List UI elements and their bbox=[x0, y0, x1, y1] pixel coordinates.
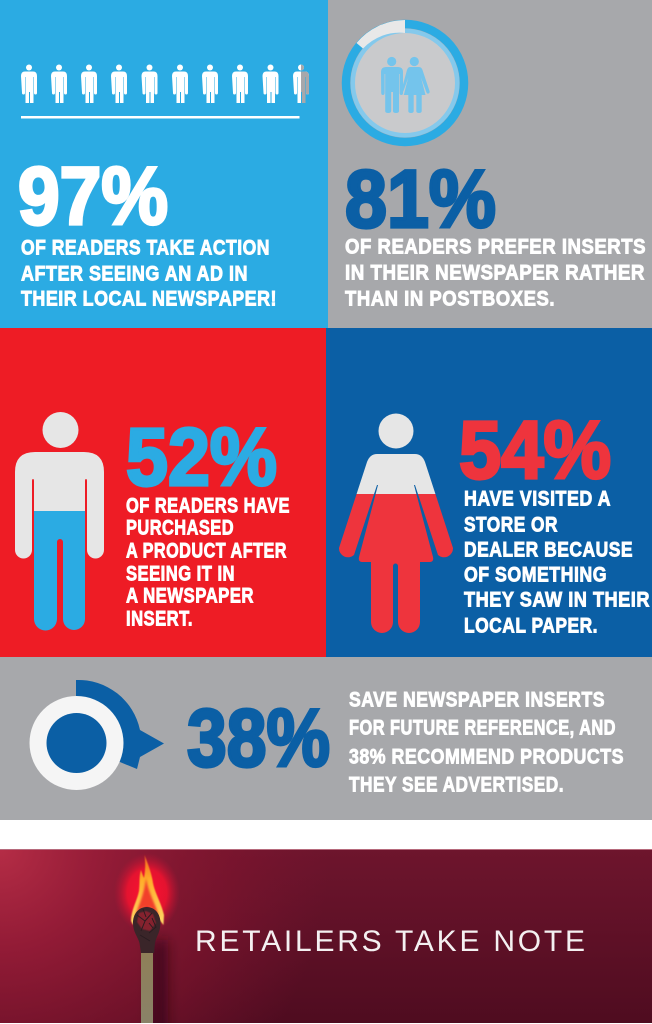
icon: couple in progress ring bbox=[346, 20, 464, 142]
text: purchased: OF READERS HAVE bbox=[126, 493, 290, 517]
icon: man two-tone figure bbox=[15, 412, 104, 630]
text: visited a store: OF SOMETHING bbox=[464, 562, 607, 586]
stat: 81%: 81% bbox=[345, 154, 496, 245]
banner: retailers take note bbox=[0, 849, 652, 1024]
text: purchased bbox=[126, 493, 290, 630]
text: save inserts bbox=[349, 687, 624, 796]
stat: 97%: 97% bbox=[18, 151, 168, 242]
icon: lit match bbox=[114, 853, 180, 1023]
text: take action: AFTER SEEING AN AD IN bbox=[21, 261, 248, 285]
text: purchased: SEEING IT IN bbox=[126, 561, 235, 585]
text: visited a store: HAVE VISITED A bbox=[464, 486, 611, 510]
panel: 38% save inserts bbox=[0, 657, 652, 820]
match head bbox=[133, 907, 160, 953]
text: purchased: INSERT. bbox=[126, 606, 193, 630]
panel: 54% visited a store bbox=[326, 328, 652, 657]
text: prefer inserts: THAN IN POSTBOXES. bbox=[345, 286, 555, 310]
text: purchased: PURCHASED bbox=[126, 515, 234, 539]
stat: 38%: 38% bbox=[187, 693, 330, 784]
text: purchased: A PRODUCT AFTER bbox=[126, 538, 287, 562]
panel: 97% take action bbox=[0, 0, 328, 328]
text: prefer inserts bbox=[345, 234, 646, 310]
icon: circular arrow dial bbox=[30, 680, 164, 790]
text: visited a store: STORE OR bbox=[464, 512, 558, 536]
panel: 52% purchased bbox=[0, 328, 326, 657]
banner title: RETAILERS TAKE NOTE bbox=[195, 925, 585, 958]
icon: woman two-tone figure bbox=[339, 414, 453, 633]
text: take action bbox=[21, 235, 277, 310]
stat: 52%: 52% bbox=[126, 412, 277, 503]
text: save inserts: THEY SEE ADVERTISED. bbox=[349, 772, 564, 796]
text: save inserts: SAVE NEWSPAPER INSERTS bbox=[349, 687, 605, 711]
text: take action: THEIR LOCAL NEWSPAPER! bbox=[21, 286, 277, 310]
text: visited a store bbox=[464, 486, 650, 637]
icon row: ten people bbox=[21, 64, 309, 103]
text: take action: OF READERS TAKE ACTION bbox=[21, 235, 270, 259]
text: visited a store: LOCAL PAPER. bbox=[464, 613, 598, 637]
panel: 81% prefer inserts bbox=[328, 0, 652, 328]
text: purchased: A NEWSPAPER bbox=[126, 583, 254, 607]
stat: 54%: 54% bbox=[459, 405, 611, 496]
